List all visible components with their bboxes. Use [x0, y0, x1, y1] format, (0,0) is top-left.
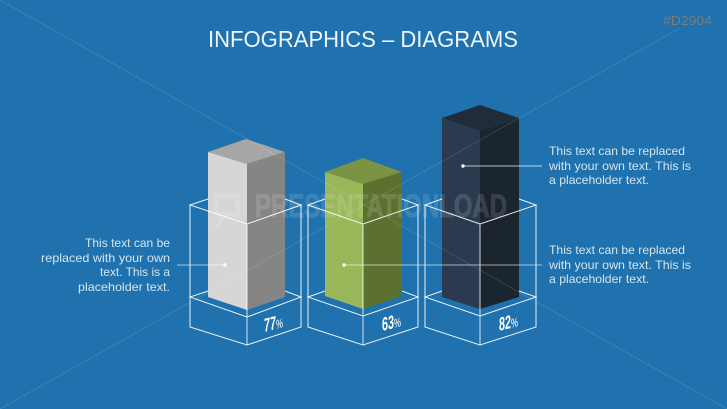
title: INFOGRAPHICS – DIAGRAMS	[208, 26, 518, 52]
bar 2: green 63%	[308, 158, 418, 345]
text block: left: replaced with your own	[41, 251, 170, 265]
callout line: dark bar	[461, 164, 542, 168]
callout line: grey bar	[177, 263, 227, 267]
text block: right bottom	[548, 243, 691, 286]
text block: left: This text can be	[85, 236, 170, 250]
label: 63%: 63%	[382, 310, 401, 336]
bar 1: grey 77%	[190, 139, 301, 345]
text block: right bottom: a placeholder text.	[549, 272, 649, 286]
watermark: presentationload: PRESENTATIONLOAD	[255, 188, 507, 224]
bar 3: dark 82%	[425, 105, 536, 345]
text block: right top: This text can be replaced	[549, 144, 685, 158]
text block: right bottom: This text can be replaced	[549, 243, 685, 257]
text block: right top: with your own text. This is	[548, 159, 691, 173]
text block: right top: a placeholder text.	[549, 173, 649, 187]
label: 77%: 77%	[264, 311, 283, 337]
watermark: presentationload	[214, 188, 507, 230]
callout line: green bar	[342, 263, 542, 267]
text block: right bottom: with your own text. This is	[548, 258, 691, 272]
slide code: #D2904	[663, 13, 712, 28]
text block: left	[41, 236, 170, 294]
text block: right top	[548, 144, 691, 187]
text block: left: text. This is a	[100, 265, 170, 279]
text block: left: placeholder text.	[78, 280, 170, 294]
label: 82%: 82%	[499, 310, 518, 336]
